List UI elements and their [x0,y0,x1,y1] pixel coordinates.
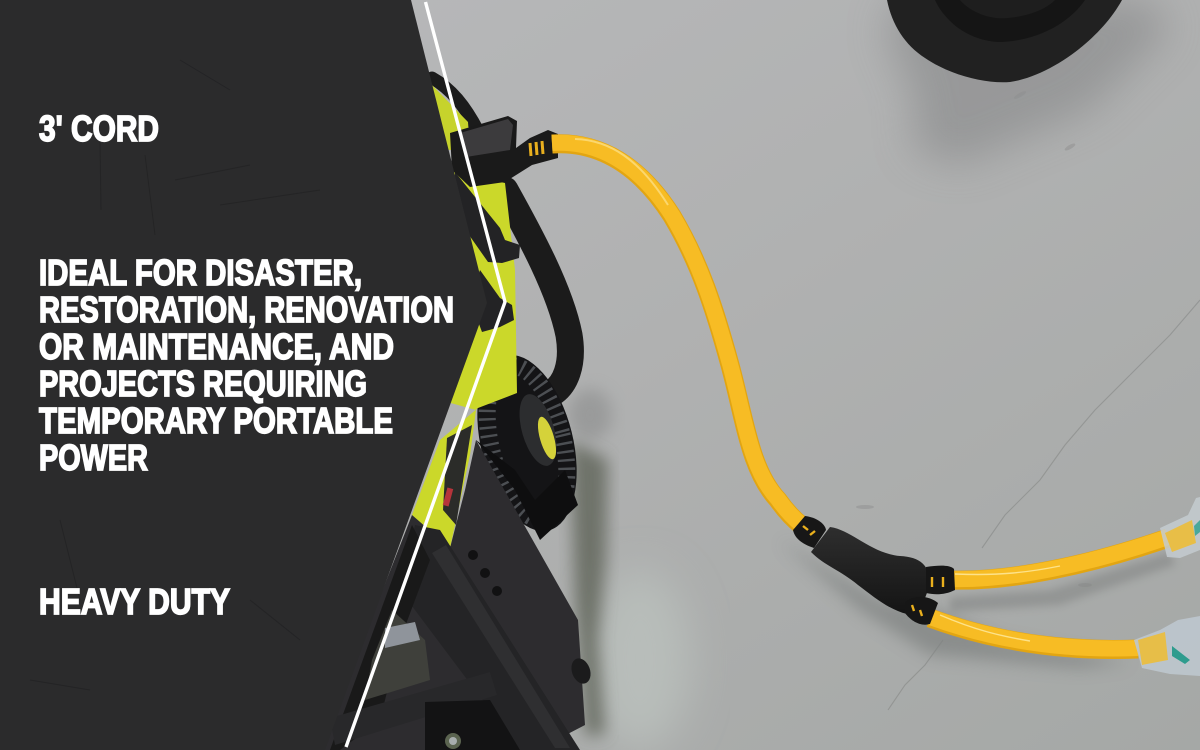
feature text: ideal uses: PROJECTS REQUIRING [39,363,367,404]
tire [887,0,1122,82]
main yellow cord [552,139,802,526]
generator: dark housing plate [320,440,594,750]
feature text: ideal uses: TEMPORARY PORTABLE [39,400,393,441]
generator: black clips on frame [455,172,520,332]
black Y splitter [793,516,955,625]
yellow cord branch two [930,615,1138,649]
feature text: heavy duty: HEAVY DUTY [39,581,230,622]
feature text: ideal uses: IDEAL FOR DISASTER, [39,252,362,293]
feature text: ideal uses: RESTORATION, RENOVATION [39,289,454,330]
shadow: generator on floor [568,389,612,735]
feature text: 3' cord: 3' CORD [39,108,159,149]
clear lighted plug, lower [1134,616,1200,676]
generator: yellow-green frame [412,85,517,548]
generator: engine parts and tube frame [330,610,520,750]
generator: black handle bar [432,78,570,393]
generator plug: black connector [450,116,558,187]
feature text: ideal uses [39,252,454,478]
shadow: Y splitter and cords on floor [780,540,1175,668]
shadow: tire on floor [885,0,1170,165]
feature text: ideal uses: OR MAINTENANCE, AND [39,326,394,367]
dark side panel [0,0,487,750]
yellow cord branch one [950,537,1168,580]
white outline chevron line [346,2,505,747]
generator: recoil fan disc [461,345,593,541]
feature text: ideal uses: POWER [39,437,148,478]
clear lighted plug, upper [1160,497,1200,558]
